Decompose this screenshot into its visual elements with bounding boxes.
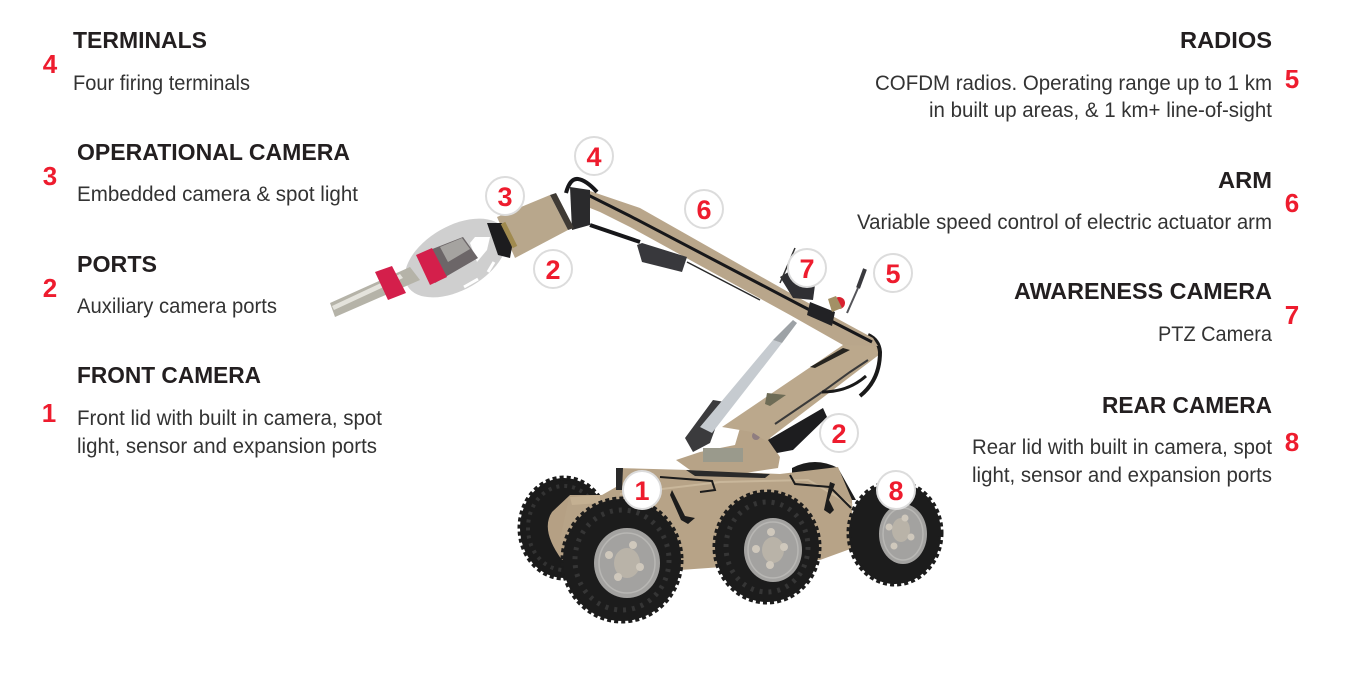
feature 1: front camera: light, sensor and expansion ports [77, 435, 377, 458]
callout markers [486, 137, 915, 509]
feature 4: terminals: TERMINALS [73, 27, 207, 53]
marker 5: 5 [885, 259, 901, 289]
feature 2: ports: PORTS [77, 251, 157, 277]
marker 3: 3 [497, 182, 513, 212]
feature 7: awareness camera [1014, 278, 1299, 346]
chassis body [560, 467, 853, 572]
marker 6: 6 [696, 195, 712, 225]
awareness PTZ camera [780, 248, 815, 300]
feature 1: front camera [42, 362, 382, 458]
feature 6: arm: Variable speed control of electric actuator arm [857, 211, 1272, 234]
front wheel [563, 499, 681, 621]
feature 8: rear camera: REAR CAMERA [1102, 392, 1272, 418]
marker 4: 4 [586, 142, 602, 172]
feature 7: awareness camera: 7 [1285, 300, 1299, 330]
feature 8: rear camera: 8 [1285, 427, 1299, 457]
feature 2: ports: Auxiliary camera ports [77, 295, 277, 318]
feature 2: ports [43, 251, 277, 318]
feature 1: front camera: Front lid with built in camera, spot [77, 407, 382, 430]
feature 5: radios: in built up areas, & 1 km+ line-of-sight [929, 99, 1272, 122]
feature 7: awareness camera: AWARENESS CAMERA [1014, 278, 1272, 304]
feature 5: radios: 5 [1285, 64, 1299, 94]
marker 8 [877, 471, 915, 509]
marker 7 [788, 249, 826, 287]
marker 8: 8 [888, 476, 904, 506]
feature 2: ports: 2 [43, 273, 57, 303]
feature 3: operational camera: OPERATIONAL CAMERA [77, 139, 350, 165]
middle wheel [715, 492, 819, 602]
feature 5: radios: RADIOS [1180, 27, 1272, 53]
feature 3: operational camera: 3 [43, 161, 57, 191]
back left wheel [520, 478, 612, 578]
marker 2 on end effector: 2 [545, 255, 561, 285]
marker 4 [575, 137, 613, 175]
marker 6 [685, 190, 723, 228]
gripper disc [392, 202, 520, 314]
lower arm [722, 335, 880, 441]
turntable base [676, 424, 780, 478]
feature 6: arm [857, 167, 1299, 234]
camera rod with red clamps [330, 248, 447, 317]
rear actuator motor [768, 408, 827, 453]
feature 3: operational camera [43, 139, 358, 206]
feature 1: front camera: 1 [42, 398, 56, 428]
feature 4: terminals: 4 [43, 49, 58, 79]
end effector block [497, 193, 574, 258]
feature 4: terminals: Four firing terminals [73, 72, 250, 95]
marker 2 on lower arm [820, 414, 858, 452]
feature 7: awareness camera: PTZ Camera [1158, 323, 1272, 346]
feature 6: arm: ARM [1218, 167, 1272, 193]
feature 5: radios [875, 27, 1299, 122]
marker 2 on lower arm: 2 [831, 419, 847, 449]
feature 4: terminals [43, 27, 250, 95]
feature 1: front camera: FRONT CAMERA [77, 362, 261, 388]
feature 5: radios: COFDM radios. Operating range up to 1 km [875, 72, 1272, 95]
marker 3 [486, 177, 524, 215]
marker 1 [623, 471, 661, 509]
silver tilt actuator [685, 320, 797, 452]
illustration: robot [330, 179, 941, 621]
main arm [566, 179, 878, 346]
feature 8: rear camera: Rear lid with built in camera, spot [972, 436, 1272, 459]
marker 1: 1 [634, 476, 650, 506]
feature 8: rear camera [972, 392, 1299, 487]
far side rear wheel [792, 462, 856, 500]
panel: right feature list [857, 27, 1299, 487]
feature 6: arm: 6 [1285, 188, 1299, 218]
marker 5 [874, 254, 912, 292]
marker 2 on end effector [534, 250, 572, 288]
panel: left feature list [42, 27, 382, 458]
marker 7: 7 [799, 254, 815, 284]
rear wheel [849, 482, 941, 584]
feature 8: rear camera: light, sensor and expansion ports [972, 464, 1272, 487]
radio box and antenna [807, 269, 865, 326]
feature 3: operational camera: Embedded camera & spot light [77, 183, 358, 206]
